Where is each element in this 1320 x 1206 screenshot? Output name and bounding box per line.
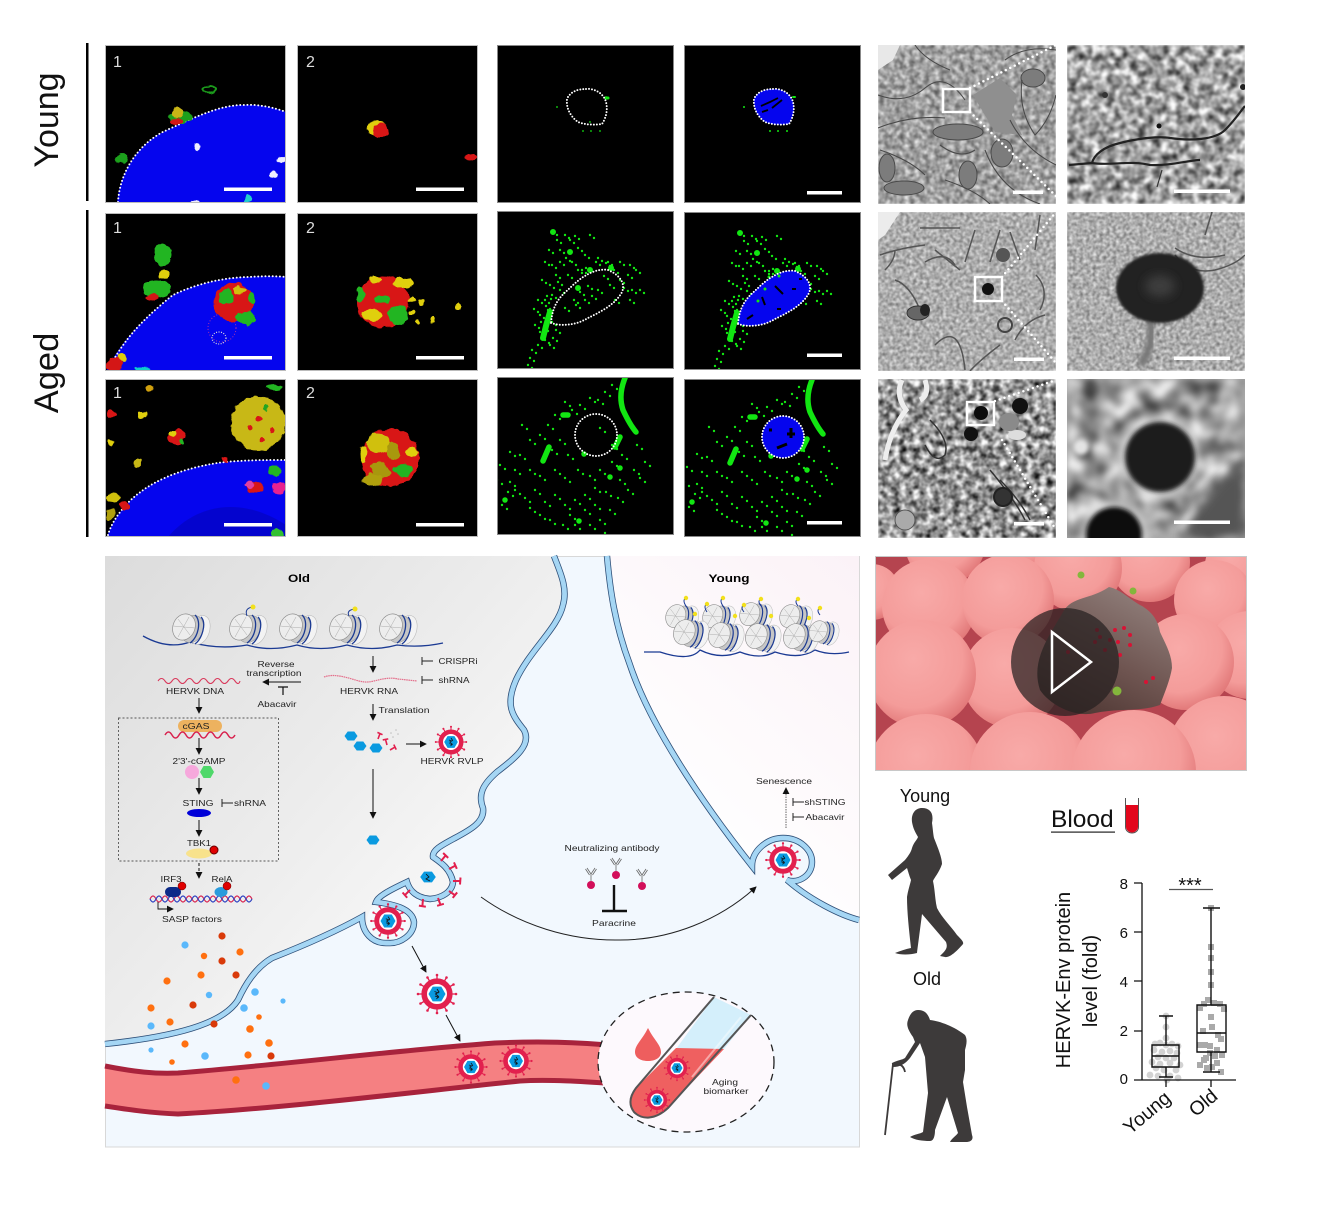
x label Old: Old <box>1185 1085 1222 1121</box>
arrow: into vessel <box>446 1015 460 1041</box>
cGAS: cGAS <box>182 721 210 731</box>
panel: aged confocal 3D 1 row 2: 1 <box>113 220 122 237</box>
dark cell body <box>1037 587 1172 714</box>
panel: video still <box>875 556 1247 771</box>
text: RelA: RelA <box>212 874 233 884</box>
arrow: translation <box>372 704 374 720</box>
text: Neutralizing antibody: Neutralizing antibody <box>564 843 661 853</box>
inhibitor: CRISPRi <box>422 656 478 666</box>
icon: virion in vessel <box>500 1045 532 1077</box>
panel: EM aged overview row 2 <box>878 212 1056 371</box>
y tick labels: 4 <box>1120 974 1128 991</box>
panel: aged confocal 3D 1 row 2 <box>105 213 286 371</box>
y axis title line 2: level (fold) <box>1080 935 1102 1027</box>
TBK1 <box>186 838 218 858</box>
significance bar <box>1169 888 1213 890</box>
inhibitor: Abacavir <box>793 812 845 822</box>
panel: young confocal 3D 1: 1 <box>113 54 122 71</box>
arrow: to RVLP <box>406 743 426 745</box>
2'3'-cGAMP <box>172 756 226 779</box>
text: SASP factors: SASP factors <box>162 914 222 924</box>
panel: young merged with nucleus <box>684 45 861 203</box>
panel: aged confocal 3D 2 row 3 <box>297 379 478 537</box>
x label Young: Young <box>1119 1087 1175 1139</box>
data points young <box>1147 1013 1183 1083</box>
inhibitor: shRNA: shRNA <box>234 798 267 808</box>
label bar: Aged <box>86 210 88 537</box>
panel: aged HERVK staining row 2 <box>497 211 674 369</box>
text: HERVK DNA: HERVK DNA <box>166 686 225 696</box>
chromatin: compact (young) <box>644 598 849 657</box>
panel: EM aged zoom row 2 <box>1067 212 1245 371</box>
callout: aging biomarker tube: Aging <box>712 1077 738 1087</box>
silhouette: young person walking <box>888 808 963 957</box>
inhibitor: shRNA <box>422 675 470 685</box>
box young <box>1152 1016 1179 1077</box>
SASP particles <box>147 932 286 1065</box>
arrow: paracrine spread <box>481 887 756 940</box>
arrow: to senescence <box>785 788 787 828</box>
text: Abacavir: Abacavir <box>258 699 297 709</box>
text: Translation: Translation <box>378 705 430 715</box>
silhouette: old person with cane <box>885 1010 973 1142</box>
text: Paracrine: Paracrine <box>592 918 636 928</box>
panel: aged confocal 3D 2 row 2 <box>297 213 478 371</box>
inhibitor: Abacavir <box>278 687 288 695</box>
inhibitor: shSTING: shSTING <box>804 797 846 807</box>
cell: young cell cytoplasm <box>607 556 859 920</box>
inhibitor: Abacavir: Abacavir <box>806 812 845 822</box>
y tick labels <box>1120 876 1128 1088</box>
blood drop <box>635 1028 661 1061</box>
text: Reverse: Reverse <box>258 659 295 669</box>
wave: HERVK RNA <box>324 676 417 682</box>
text: HERVK RVLP: HERVK RVLP <box>420 756 484 766</box>
arrow <box>198 778 200 794</box>
STING <box>182 798 214 817</box>
arrow: DNA to cGAS <box>198 698 200 713</box>
callout: aging biomarker tube: biomarker <box>704 1086 749 1096</box>
play button disc <box>1011 608 1119 716</box>
budding capsid with envelope spikes <box>402 853 460 907</box>
chart: HERVK-Env protein box plot <box>1053 875 1236 1139</box>
play triangle <box>1052 632 1091 692</box>
DNA helix with factors <box>150 882 252 909</box>
membrane: young cell <box>607 556 859 920</box>
panel: pathway schematic <box>105 556 860 1147</box>
arrow: to membrane <box>372 769 374 818</box>
significance stars: *** <box>1178 875 1202 897</box>
heading: Blood: Blood <box>1051 806 1114 833</box>
arrow: reverse transcription <box>263 681 301 683</box>
blood vessel <box>105 1042 620 1114</box>
box: cGAS-STING pathway <box>118 718 278 861</box>
text: transcription: transcription <box>246 668 302 678</box>
text: Senescence: Senescence <box>756 776 812 786</box>
arrow: transcription <box>372 656 374 672</box>
icons: antibodies <box>586 858 648 890</box>
label: Old: Old <box>913 969 941 989</box>
icon: blood tube <box>1126 798 1138 833</box>
panel: aged confocal 3D 2 row 2: 2 <box>306 220 315 237</box>
heading: Old: Old <box>288 573 310 585</box>
panel: aged confocal 3D 1 row 3: 1 <box>113 385 122 402</box>
y tick labels: 8 <box>1120 876 1128 893</box>
axes <box>1134 883 1236 1087</box>
y tick labels: 6 <box>1120 925 1128 942</box>
icon: virion in young vesicle <box>766 843 800 877</box>
panel: EM aged zoom row 3 <box>1067 379 1245 538</box>
text: HERVK RNA: HERVK RNA <box>340 686 399 696</box>
heading: Young: Young <box>708 573 750 585</box>
inhibitor: paracrine block <box>602 885 627 911</box>
icon: free virion <box>418 975 456 1013</box>
y axis title: HERVK-Env protein <box>1053 892 1075 1068</box>
vesicle interior <box>367 900 409 942</box>
icon: HERVK RVLP virion <box>436 727 466 757</box>
panel: aged confocal 3D 2 row 3: 2 <box>306 385 315 402</box>
label: Young: Young <box>28 72 66 168</box>
panel: young confocal 3D 2: 2 <box>306 54 315 71</box>
cell: old cell cytoplasm <box>105 556 565 1044</box>
y tick labels: 0 <box>1120 1071 1128 1088</box>
wave: HERVK DNA <box>158 678 240 684</box>
arrow: dashed to transcription factors <box>198 863 200 878</box>
arrow: release <box>412 946 426 972</box>
label: Aged: Aged <box>28 333 66 413</box>
icon: virion in vesicle <box>371 904 405 938</box>
inhibitor: shSTING <box>793 797 846 807</box>
label: Young: Young <box>900 786 950 806</box>
text: IRF3: IRF3 <box>160 874 182 884</box>
data points old <box>1200 908 1224 1072</box>
chromatin: open (old) <box>143 604 443 648</box>
panel: aged confocal 3D 1 row 3 <box>105 379 286 537</box>
viral proteins <box>344 730 398 752</box>
panel: young confocal 3D 2 <box>297 45 478 203</box>
panel: EM young overview <box>878 45 1056 204</box>
panel: aged merged row 2 <box>684 212 861 370</box>
STING: STING <box>182 798 214 808</box>
panel: EM aged overview row 3 <box>878 379 1056 538</box>
panel: EM young zoom <box>1067 45 1245 204</box>
inhibitor: shRNA: shRNA <box>438 675 470 685</box>
y tick labels: 2 <box>1120 1023 1128 1040</box>
panel: aged merged row 3 <box>684 379 861 537</box>
inhibitor: CRISPRi: CRISPRi <box>438 656 478 666</box>
arrow <box>198 820 200 836</box>
label bar: Young <box>86 43 88 201</box>
icon: virion in vessel <box>455 1051 487 1083</box>
cGAS <box>165 720 235 738</box>
test tube <box>630 997 751 1118</box>
membrane: old cell <box>105 556 565 1044</box>
inhibitor: shRNA <box>222 798 267 808</box>
arrow <box>198 738 200 754</box>
panel: young confocal 3D 1 <box>105 45 286 203</box>
underline: Blood <box>1051 832 1115 833</box>
callout: aging biomarker tube <box>598 992 774 1132</box>
box old <box>1197 908 1226 1072</box>
2'3'-cGAMP: 2'3'-cGAMP <box>172 756 226 766</box>
icon: capsid <box>366 836 380 844</box>
TBK1: TBK1 <box>187 838 211 848</box>
panel: aged HERVK staining row 3 <box>497 377 674 535</box>
panel: young HERVK staining <box>497 45 674 203</box>
